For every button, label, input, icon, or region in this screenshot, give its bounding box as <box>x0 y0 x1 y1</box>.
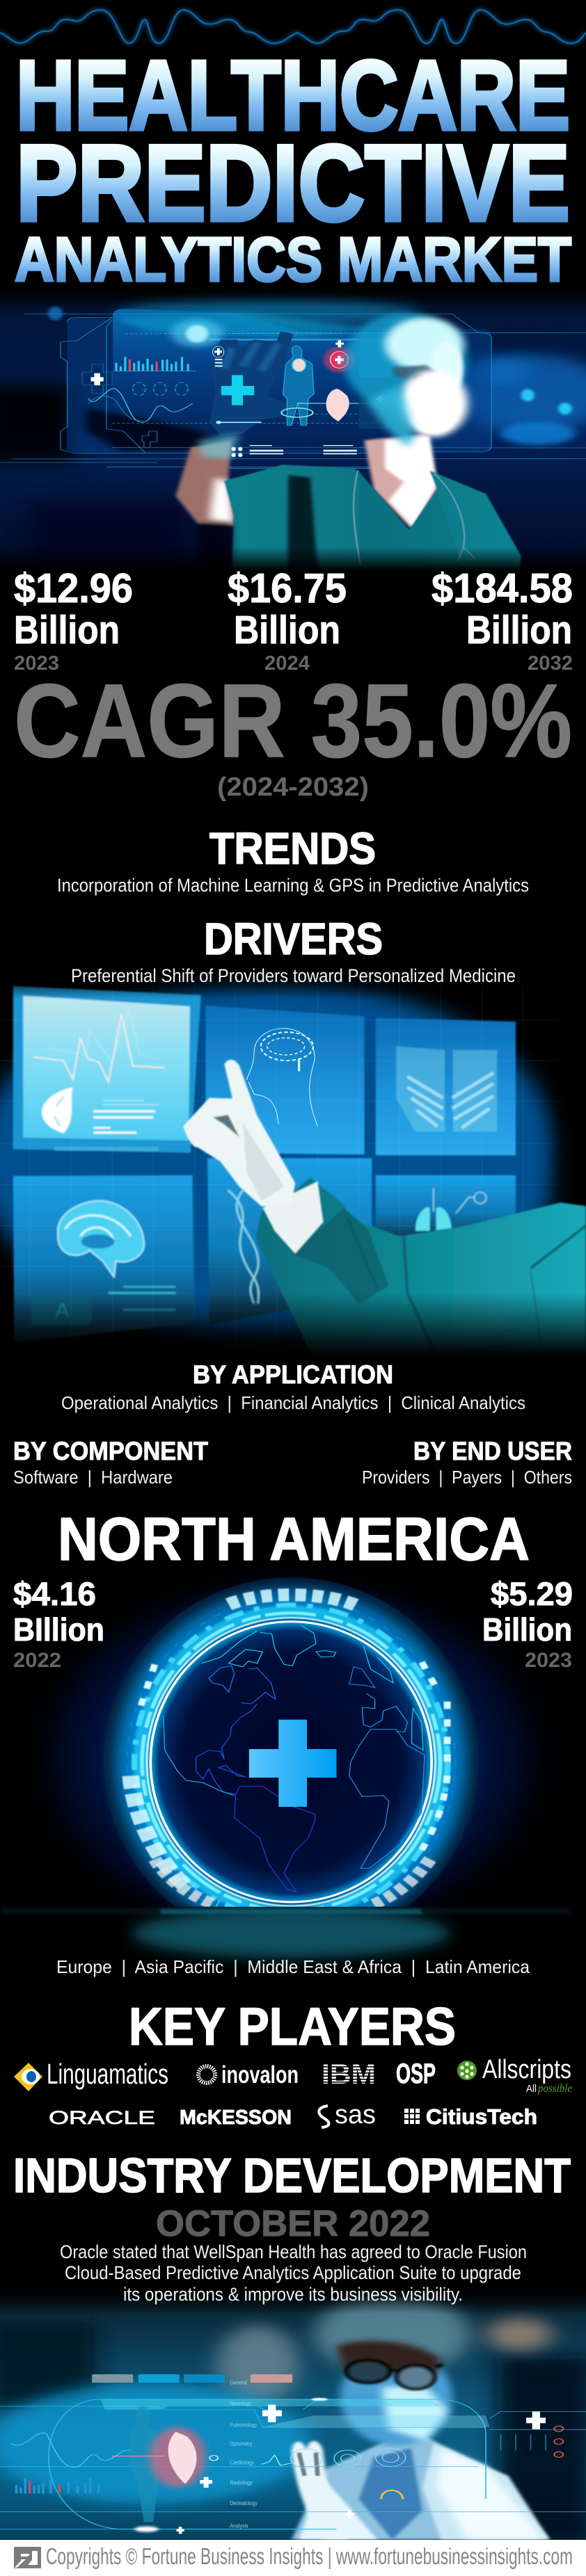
image: gloved hand touching medical screens <box>0 960 586 1355</box>
heading: by end user: BY END USER <box>413 1437 572 1465</box>
sleeve <box>256 1177 586 1355</box>
logo: OSP: OSP <box>396 2059 436 2089</box>
specialty labels: Neurology <box>230 2400 252 2407</box>
hero image: doctor with holographic display <box>0 287 586 571</box>
screen: ECG and heart <box>13 986 201 1153</box>
logo: Allscripts <box>457 2055 572 2095</box>
image: doctor with hud <box>0 2286 586 2545</box>
drivers text: Preferential Shift of Providers toward Personalized Medicine <box>71 965 516 986</box>
specialty labels: Optometry <box>230 2440 253 2447</box>
continents <box>164 1625 425 1892</box>
stat: 2024 market size: Billion <box>234 608 340 652</box>
stat: 2032 market size: 2032 <box>528 652 573 675</box>
globe <box>150 1622 431 1902</box>
hud capsule <box>0 2399 586 2529</box>
neck <box>365 433 437 529</box>
stat: 2024 market size <box>228 565 347 675</box>
stat: 2023 market size: $12.96 <box>14 565 133 611</box>
logo: SAS: sas <box>335 2100 376 2130</box>
screen: DNA <box>207 1158 372 1325</box>
component list: Software | Hardware <box>13 1467 173 1488</box>
stat: 2032 market size: $184.58 <box>431 565 573 611</box>
holographic panel <box>0 309 586 468</box>
lower hud <box>231 445 357 457</box>
data tabs <box>92 2374 292 2383</box>
surgical cap and face glow <box>344 313 468 447</box>
human figure hologram <box>281 346 374 426</box>
stat: 2023 market size <box>14 565 133 675</box>
stat: 2024 market size: $16.75 <box>228 565 347 611</box>
stat: north america 2022: $4.16 <box>13 1575 96 1612</box>
specialty labels: Radiology <box>230 2479 253 2486</box>
footer <box>0 2540 586 2576</box>
heart <box>326 389 349 421</box>
stat: north america 2022: 2022 <box>13 1649 61 1672</box>
stat: 2032 market size <box>431 565 573 675</box>
bar chart <box>114 357 196 371</box>
icon: heartbeat wave <box>0 10 586 43</box>
screen: brain <box>13 1175 194 1343</box>
stat: north america 2023: $5.29 <box>491 1575 573 1612</box>
development text <box>60 2241 527 2305</box>
heading: key players: KEY PLAYERS <box>129 1997 456 2056</box>
rings <box>113 1586 468 1938</box>
crosses and flares <box>134 2398 546 2534</box>
stat: north america 2023: 2023 <box>525 1649 572 1672</box>
development text: Cloud-Based Predictive Analytics Application Suite to upgrade <box>65 2262 521 2283</box>
stat: north america 2022: BIllion <box>13 1611 104 1648</box>
specialty labels: Analysis <box>230 2522 248 2529</box>
image: glowing globe portal <box>1 1558 569 1958</box>
heading: by application: BY APPLICATION <box>193 1360 393 1389</box>
floor <box>1 1908 569 1958</box>
other regions list: Europe | Asia Pacific | Middle East & Africa | Latin America <box>56 1956 530 1977</box>
icon: plus <box>249 1720 337 1807</box>
development text: Oracle stated that WellSpan Health has agreed to Oracle Fusion <box>60 2241 527 2262</box>
stat: 2023 market size: 2023 <box>14 652 59 675</box>
doctor <box>292 2341 549 2540</box>
logo: Allscripts: All <box>526 2083 537 2095</box>
stat: north america 2022 <box>13 1575 104 1672</box>
logo: Allscripts: Allscripts <box>482 2055 571 2084</box>
heading: trends: TRENDS <box>209 823 376 874</box>
specialty labels: General <box>230 2379 247 2386</box>
specialty labels: Dermatology <box>230 2500 258 2506</box>
logo: Allscripts: possible <box>537 2082 572 2095</box>
flare <box>171 319 223 347</box>
grid lines <box>0 974 561 1346</box>
title <box>15 40 571 295</box>
logo: Inovalon: inovalon <box>221 2061 299 2088</box>
icon: cross markers and dials <box>82 364 193 447</box>
screen: lungs <box>376 1175 516 1243</box>
icon: Fortune Business Insights logo <box>14 2547 41 2568</box>
development date: OCTOBER 2022 <box>156 2203 430 2244</box>
specialty labels: Cardiology <box>230 2459 254 2466</box>
logo: Linguamatics <box>14 2058 168 2091</box>
hologram body and heart <box>112 2406 218 2522</box>
trends text: Incorporation of Machine Learning & GPS in Predictive Analytics <box>57 875 529 896</box>
heading: drivers: DRIVERS <box>204 914 383 964</box>
stat: 2024 market size: 2024 <box>264 652 310 675</box>
red gauge <box>324 340 355 373</box>
image: doctor with hud: Pulmonology <box>230 2422 258 2429</box>
bar chart <box>15 2478 100 2493</box>
screen: chest x-ray <box>376 1018 516 1155</box>
CAGR period: (2024-2032) <box>217 773 369 802</box>
dial rings <box>262 2426 563 2499</box>
application list: Operational Analytics | Financial Analytics | Clinical Analytics <box>61 1392 525 1413</box>
glove <box>209 332 295 436</box>
stat: north america 2023 <box>482 1575 573 1672</box>
heading: north america: NORTH AMERICA <box>58 1506 530 1573</box>
stat: 2032 market size: Billion <box>466 608 572 652</box>
stat: north america 2023: Billion <box>482 1611 572 1648</box>
logo: McKesson: McKESSON <box>180 2107 292 2129</box>
logo: Linguamatics: Linguamatics <box>47 2058 168 2090</box>
stat: 2023 market size: Billion <box>14 608 120 652</box>
screen: brain profile <box>205 1006 365 1154</box>
logo: CitiusTech: CitiusTech <box>426 2104 537 2129</box>
logo: Inovalon <box>198 2061 299 2088</box>
glove <box>183 1060 324 1254</box>
side panel <box>359 374 396 428</box>
screen: brain: A <box>55 1300 70 1322</box>
development text: its operations & improve its business visibility. <box>123 2284 463 2305</box>
heading: by component: BY COMPONENT <box>13 1437 208 1465</box>
arm <box>175 433 239 526</box>
logo: IBM: IBM <box>322 2059 376 2090</box>
scrubs <box>198 465 521 571</box>
logo: Oracle: ORACLE <box>49 2107 155 2128</box>
specialty labels <box>230 2379 258 2529</box>
